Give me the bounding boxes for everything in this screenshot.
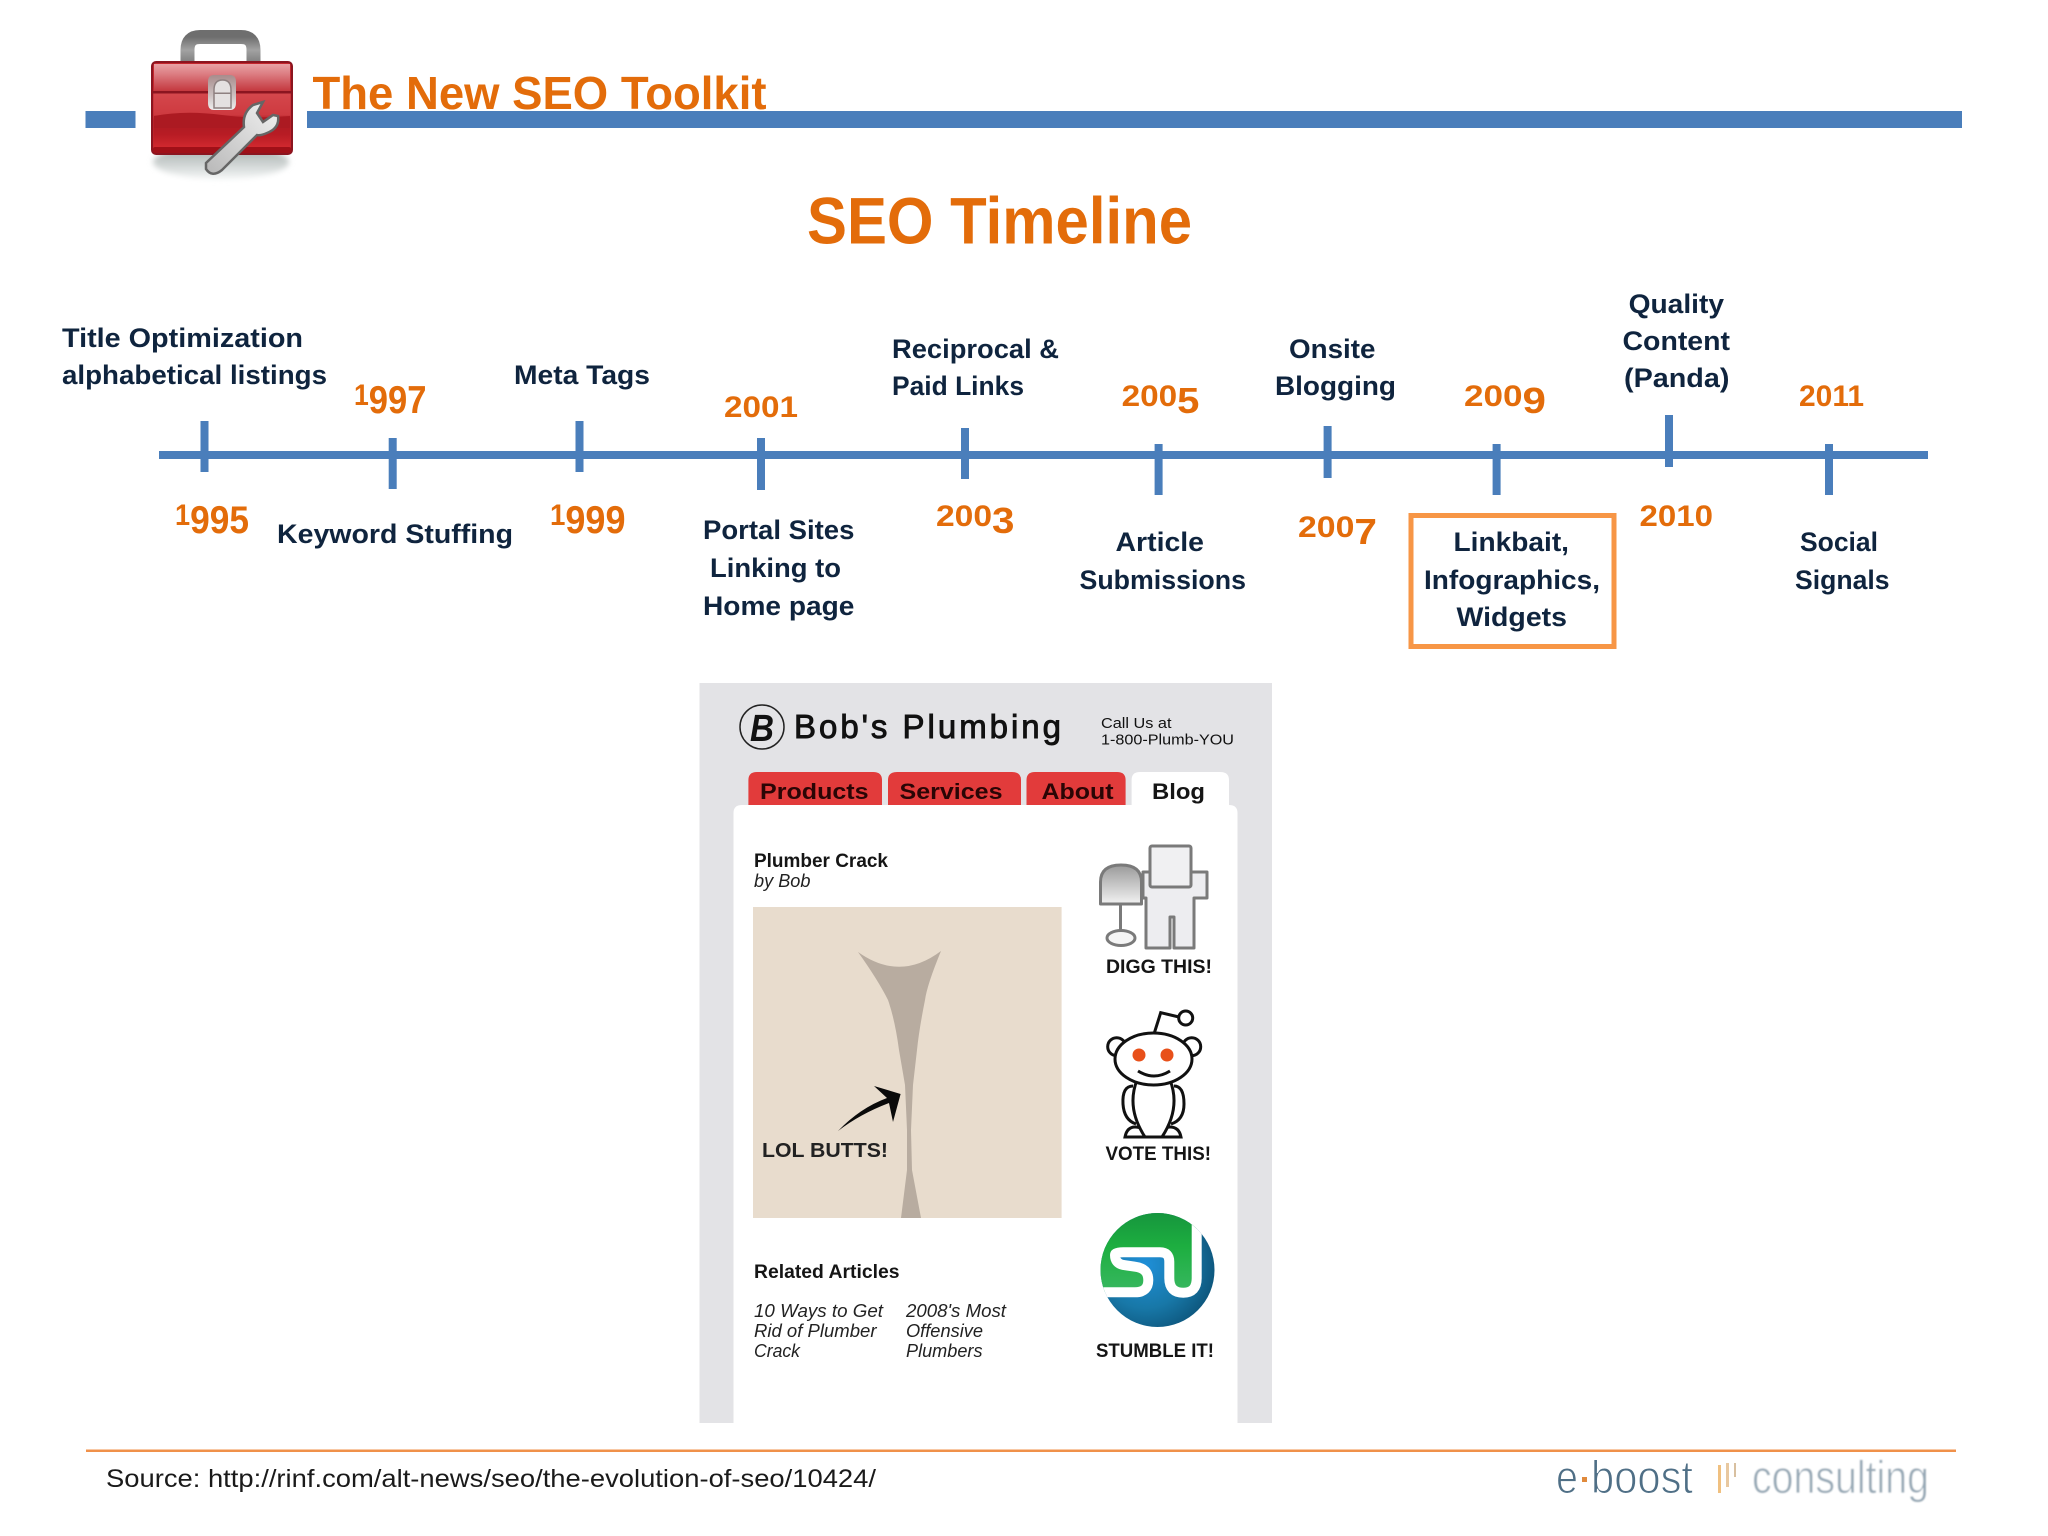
header title: The New SEO Toolkit — [312, 67, 766, 119]
label: Onsite Blogging: Onsite — [1289, 334, 1376, 364]
related article 1 — [754, 1301, 884, 1361]
label: Social Signals: Social — [1800, 527, 1878, 557]
tab: Blog — [1132, 772, 1229, 806]
label: Article Submissions: Submissions — [1080, 565, 1246, 595]
related article 2 — [905, 1301, 1007, 1361]
article heading — [754, 851, 888, 891]
label: Quality Content (Panda): Content — [1622, 326, 1730, 356]
year 1999: 999 — [565, 499, 626, 542]
year 2001: 2001 — [724, 391, 798, 424]
label: Portal Sites Linking to Home page: Home page — [703, 591, 854, 621]
label: Article Submissions — [1080, 527, 1246, 595]
related article 1: Crack — [754, 1341, 801, 1361]
label: Portal Sites Linking to Home page: Portal Sites — [703, 515, 854, 545]
label: Onsite Blogging — [1275, 334, 1396, 401]
panel background — [700, 683, 1272, 1423]
tab: Services: Services — [900, 779, 1002, 804]
related article 1: Rid of Plumber — [754, 1321, 878, 1341]
icon: StumbleUpon logo — [1100, 1213, 1214, 1327]
callout: Linkbait, Infographics, Widgets — [1411, 516, 1614, 646]
label: Quality Content (Panda): Quality — [1629, 289, 1724, 319]
article illustration: LOL BUTTS! — [762, 1140, 888, 1162]
tab: About — [1026, 772, 1126, 805]
label: Reciprocal and Paid Links: Paid Links — [892, 371, 1024, 401]
logo: e-boost consulting: e — [1556, 1451, 1578, 1503]
year 1995: 1 — [175, 499, 192, 532]
year 2011: 2011 — [1799, 380, 1864, 413]
timeline axis — [159, 451, 1928, 459]
label: Quality Content (Panda): (Panda) — [1624, 363, 1729, 393]
year 2007: 7 — [1354, 511, 1377, 552]
main title: SEO Timeline — [807, 184, 1192, 258]
footer rule — [86, 1450, 1956, 1452]
icon: red toolbox with wrench — [152, 37, 292, 179]
source text: Source: http://rinf.com/alt-news/seo/the-evolution-of-seo/10424/ — [106, 1465, 876, 1493]
callout: Linkbait, Infographics, Widgets: Widgets — [1456, 602, 1567, 632]
callout: Linkbait, Infographics, Widgets: Linkbait, — [1454, 527, 1569, 557]
related article 2: Plumbers — [906, 1341, 982, 1361]
tab: Products — [748, 772, 882, 805]
related article 1: 10 Ways to Get — [754, 1301, 884, 1321]
timeline ticks — [200, 415, 1833, 495]
label: Quality Content (Panda) — [1622, 289, 1730, 393]
phone text: Call Us at — [1101, 715, 1172, 732]
logo: B in circle: B — [750, 708, 774, 750]
label: Article Submissions: Article — [1116, 527, 1204, 557]
year 2003: 200 — [936, 500, 986, 533]
year 1999: 1 — [550, 499, 567, 532]
tab: Products: Products — [760, 779, 869, 804]
tab: Blog: Blog — [1152, 779, 1205, 804]
nav tabs — [748, 772, 1229, 806]
year 1995: 995 — [190, 499, 249, 542]
article heading: Plumber Crack — [754, 851, 888, 872]
label: Portal Sites Linking to Home page — [703, 515, 854, 621]
label: Social Signals — [1795, 527, 1890, 595]
article heading: by Bob — [754, 871, 810, 891]
year 2010: 2010 — [1640, 500, 1713, 533]
label: Keyword Stuffing: Keyword Stuffing — [277, 519, 513, 549]
label: STUMBLE IT!: STUMBLE IT! — [1096, 1341, 1214, 1362]
label: VOTE THIS!: VOTE THIS! — [1106, 1144, 1211, 1165]
label: Meta Tags: Meta Tags — [514, 360, 650, 390]
year labels — [175, 379, 1864, 552]
header bar left segment — [86, 111, 136, 128]
year 1997: 997 — [369, 379, 426, 422]
related article 2: Offensive — [906, 1321, 983, 1341]
label: Social Signals: Signals — [1795, 565, 1890, 595]
tab: Services — [888, 772, 1021, 805]
logo: B in circle — [740, 705, 784, 750]
article illustration — [753, 907, 1062, 1218]
year 2005: 5 — [1177, 380, 1199, 421]
related articles heading: Related Articles — [754, 1262, 900, 1283]
year 2003: 3 — [992, 500, 1014, 541]
year 2007: 200 — [1298, 511, 1348, 544]
year 1997: 1 — [354, 379, 371, 412]
phone text: 1-800-Plumb-YOU — [1101, 732, 1234, 748]
phone text — [1101, 715, 1234, 748]
label: Title Optimization alphabetical listings: Title Optimization — [62, 323, 303, 353]
timeline — [159, 415, 1928, 495]
callout: Linkbait, Infographics, Widgets: Infographics, — [1424, 565, 1600, 595]
tab: About: About — [1042, 779, 1114, 804]
logo: e-boost consulting — [1556, 1451, 1929, 1503]
label: Reciprocal and Paid Links — [892, 334, 1059, 401]
site name: Bob's Plumbing — [794, 708, 1061, 745]
year 2009: 9 — [1523, 380, 1546, 421]
label: DIGG THIS!: DIGG THIS! — [1106, 957, 1212, 978]
label: Onsite Blogging: Blogging — [1275, 371, 1396, 401]
header bar right segment — [307, 111, 1962, 128]
label: Title Optimization alphabetical listings: alphabetical listings — [62, 360, 327, 390]
logo: e-boost consulting: consulting — [1752, 1451, 1929, 1503]
label: Title Optimization alphabetical listings — [62, 323, 327, 390]
label: Portal Sites Linking to Home page: Linking to — [710, 553, 841, 583]
related article 2: 2008's Most — [905, 1301, 1007, 1321]
content area — [734, 805, 1238, 1423]
icon: Reddit alien — [1108, 1011, 1201, 1137]
label: Reciprocal and Paid Links: Reciprocal & — [892, 334, 1059, 364]
panel: Bob's Plumbing website mockup — [700, 683, 1272, 1423]
icon: Digg shovel guy — [1100, 846, 1207, 948]
year 2009: 200 — [1464, 380, 1514, 413]
year 2005: 200 — [1122, 380, 1172, 413]
logo: e-boost consulting: boost — [1591, 1451, 1693, 1503]
